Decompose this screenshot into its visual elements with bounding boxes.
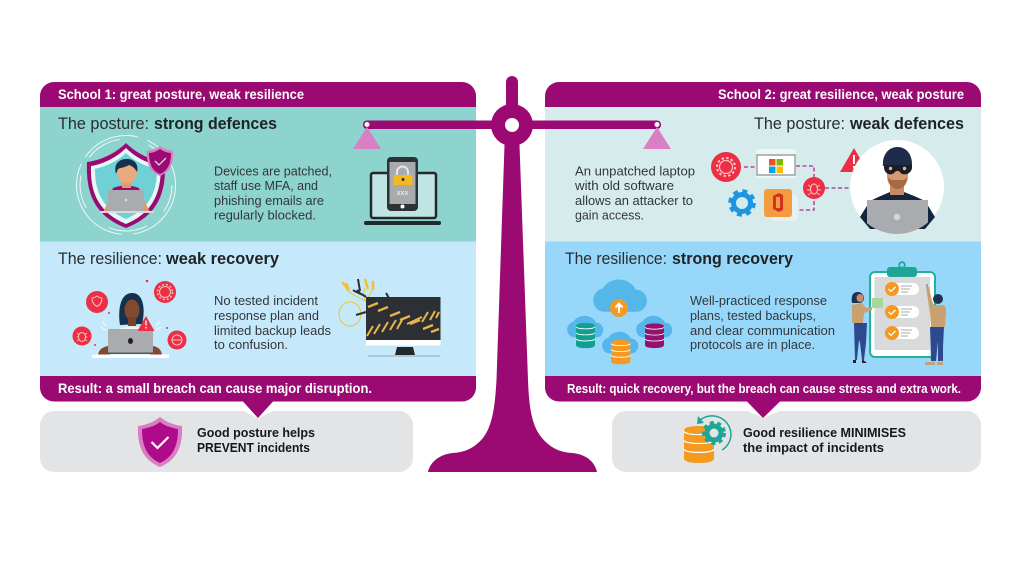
- icon: cloud backups: [567, 280, 672, 364]
- posture description: An unpatched laptop: [575, 164, 695, 178]
- resilience description: [690, 293, 835, 352]
- resilience description: limited backup leads: [214, 323, 331, 338]
- callout: good resilience: [612, 411, 981, 472]
- callout text: PREVENT incidents: [197, 440, 310, 455]
- balance scale: [353, 76, 671, 472]
- posture heading: The posture:: [754, 114, 845, 133]
- icon: hacker with laptop: [850, 140, 944, 240]
- school 2 pale posture background: [545, 106, 981, 242]
- left pan: [353, 122, 381, 149]
- callout text: the impact of incidents: [743, 440, 884, 455]
- callout text: Good posture helps: [197, 425, 315, 440]
- icon: vulnerable software network: [711, 149, 850, 221]
- callout: good posture: [40, 411, 413, 472]
- resilience description: to confusion.: [214, 337, 288, 352]
- resilience description: [214, 293, 331, 352]
- icon: monitor wrapped in warning tape with cables: [339, 279, 440, 356]
- icon: people with checklist: [852, 262, 946, 365]
- school 1 result text: Result: a small breach can cause major disruption.: [58, 380, 372, 396]
- school 1 header bar: [40, 82, 476, 107]
- posture heading: [58, 114, 277, 133]
- posture description: [574, 164, 695, 222]
- icon: laptop and phone with padlock: xxx: [397, 190, 408, 197]
- icon: warning triangle: [840, 148, 868, 172]
- posture description: with old software: [574, 178, 674, 193]
- posture description: phishing emails are: [214, 193, 324, 208]
- resilience heading: The resilience:: [565, 249, 667, 268]
- posture heading: weak defences: [849, 114, 964, 133]
- school 2 result bar with pointer: [545, 376, 981, 418]
- icon: database with gear: [684, 416, 731, 463]
- icon: shielded person with laptop: [76, 136, 176, 234]
- school 2 blue resilience background: [545, 242, 981, 376]
- icon: shield with check: [138, 417, 182, 467]
- callout text: [743, 425, 906, 455]
- resilience description: response plan and: [214, 308, 319, 323]
- posture heading: strong defences: [154, 114, 277, 133]
- school 2 heading: School 2: great resilience, weak posture: [718, 86, 964, 102]
- posture description: [214, 164, 332, 222]
- resilience description: protocols are in place.: [690, 337, 815, 352]
- school 1 result bar with pointer: [40, 376, 476, 418]
- school 1 heading: School 1: great posture, weak resilience: [58, 86, 304, 102]
- panel: school 2: [545, 82, 981, 418]
- resilience heading: The resilience:: [58, 249, 162, 268]
- school 1 teal posture background: [40, 106, 476, 242]
- school 2 header bar: [545, 82, 981, 107]
- resilience heading: strong recovery: [672, 249, 794, 268]
- posture description: regularly blocked.: [214, 208, 316, 222]
- posture heading: [754, 114, 964, 133]
- posture description: allows an attacker to: [575, 193, 693, 208]
- scale pivot: [491, 104, 533, 146]
- posture description: Devices are patched,: [214, 164, 332, 178]
- scale post and base: [428, 76, 597, 472]
- resilience description: Well-practiced response: [690, 293, 827, 308]
- resilience description: No tested incident: [214, 293, 318, 308]
- posture description: gain access.: [575, 208, 644, 222]
- school 1 blue resilience background: [40, 242, 476, 376]
- panel: school 1: [40, 82, 476, 418]
- resilience description: and clear communication: [690, 323, 835, 338]
- right pan: [643, 122, 671, 149]
- callout text: Good resilience MINIMISES: [743, 425, 906, 440]
- posture description: staff use MFA, and: [214, 178, 318, 193]
- callout text: [197, 425, 315, 455]
- resilience description: plans, tested backups,: [690, 308, 816, 323]
- resilience heading: weak recovery: [165, 249, 280, 268]
- posture heading: The posture:: [58, 114, 149, 133]
- scale beam: [363, 120, 661, 129]
- school 2 result text: Result: quick recovery, but the breach can cause stress and extra work.: [567, 381, 961, 396]
- resilience heading: [58, 249, 280, 268]
- icon: worried woman with laptop and threats: [72, 280, 186, 358]
- resilience heading: [565, 249, 794, 268]
- icon: laptop and phone with padlock: [364, 157, 441, 225]
